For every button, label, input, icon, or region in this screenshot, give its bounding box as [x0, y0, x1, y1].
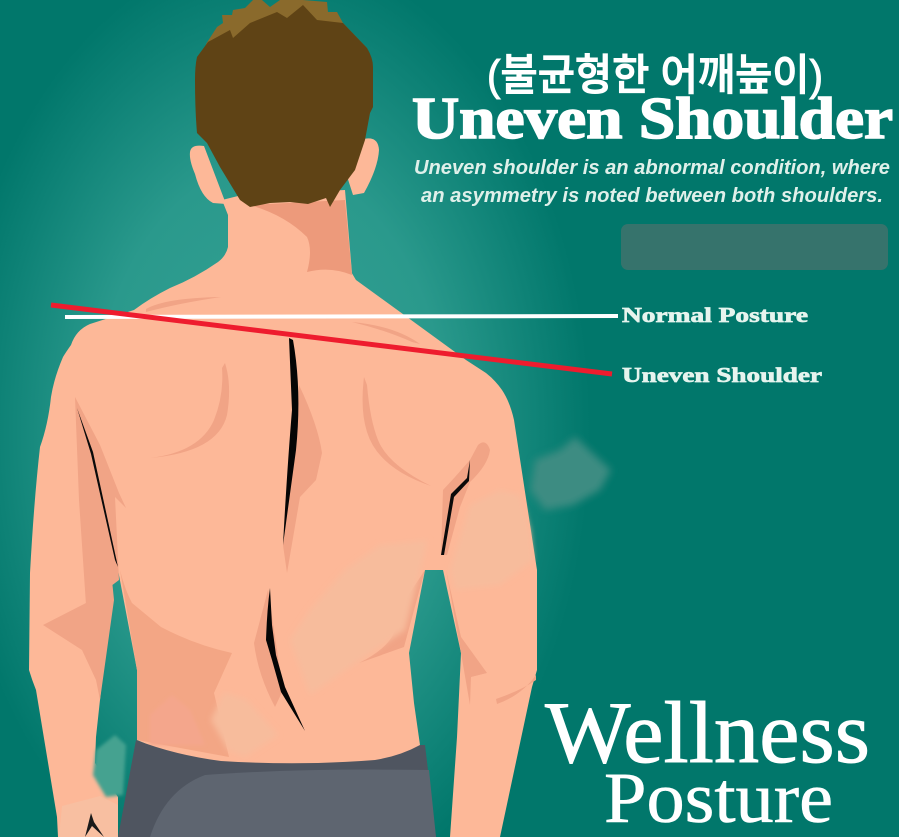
hand detail — [85, 813, 104, 837]
ears — [190, 138, 379, 204]
label: uneven shoulder: Uneven Shoulder — [622, 363, 822, 387]
brand: posture: Posture — [604, 758, 833, 837]
torso lower shading — [120, 570, 232, 757]
description: an asymmetry is noted between both shoulders. — [421, 185, 883, 207]
pink patch — [150, 695, 205, 745]
spine shading — [283, 385, 322, 573]
neck shadow — [250, 200, 352, 275]
forearm crease — [496, 675, 536, 704]
left forearm shading — [43, 570, 114, 700]
right armpit line — [441, 460, 470, 555]
label: normal posture: Normal Posture — [622, 303, 808, 327]
hair mass — [195, 5, 373, 207]
description — [414, 157, 890, 207]
teal smudge by hand — [93, 735, 126, 797]
brand: wellness: Wellness — [545, 685, 870, 782]
hair — [195, 0, 373, 207]
hand — [59, 796, 118, 837]
teal smudge right of arm — [530, 437, 611, 510]
right armpit shading — [441, 442, 490, 555]
right torso shading — [359, 570, 425, 663]
upper spine line — [283, 338, 298, 545]
right forearm shading — [446, 570, 487, 705]
left arm crease shading — [75, 397, 126, 605]
left arm crease line — [77, 408, 118, 567]
retouched skin patches — [211, 490, 533, 757]
normal posture line — [65, 316, 618, 317]
lower spine line — [266, 588, 305, 731]
figure: man from behind — [29, 138, 537, 837]
lower spine shading — [254, 590, 283, 707]
korean title: (불균형한 어깨높이) — [487, 52, 823, 100]
shorts — [118, 740, 436, 837]
body — [29, 190, 537, 837]
uneven shoulder line — [51, 305, 612, 374]
main title: Uneven Shoulder — [412, 85, 893, 151]
grey box — [621, 224, 888, 270]
shoulder shading — [146, 297, 420, 344]
description: Uneven shoulder is an abnormal condition, where — [414, 157, 890, 179]
shoulder blades — [150, 363, 431, 486]
hair highlights — [206, 0, 370, 70]
